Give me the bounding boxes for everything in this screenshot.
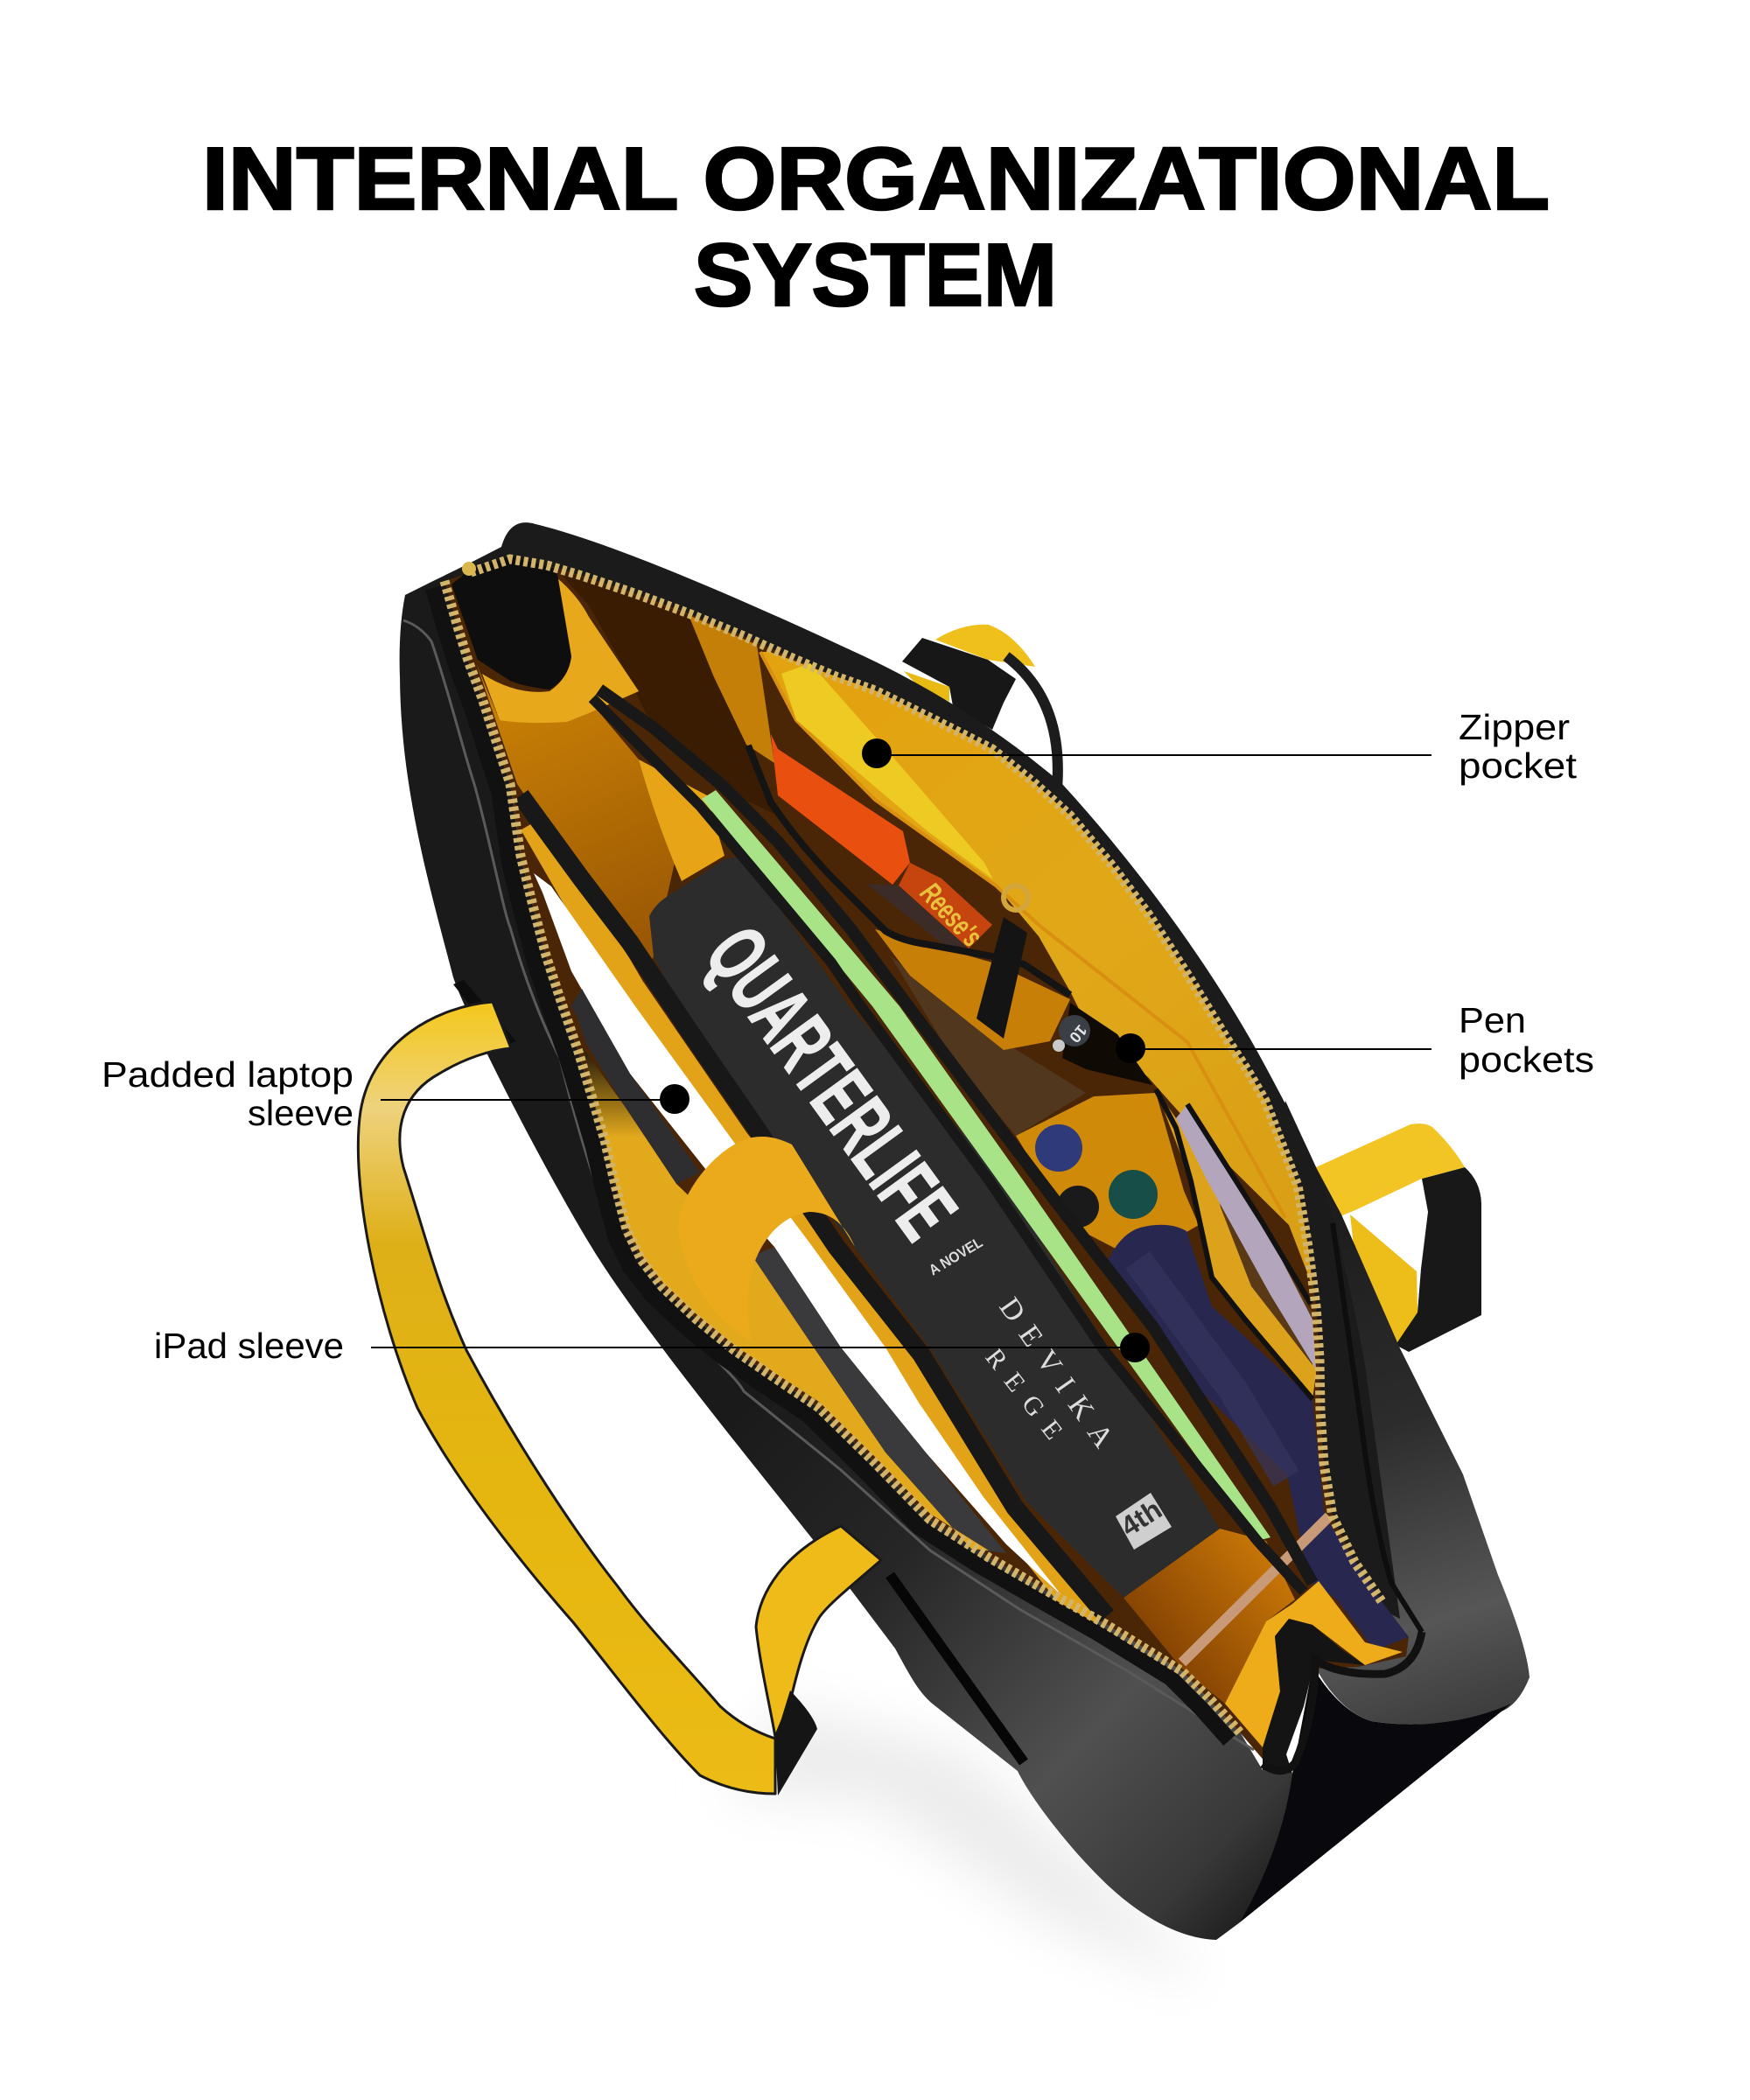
book: 4th	[1115, 1494, 1167, 1543]
callout: zipper pocket	[862, 707, 1578, 786]
callout: iPad sleeve	[154, 1326, 1150, 1366]
callout: pen pockets: Pen	[1459, 1000, 1526, 1040]
zipper tape lower	[433, 588, 1229, 1740]
pocket contents	[891, 956, 1199, 1260]
pale fold	[482, 578, 639, 723]
book	[649, 856, 1220, 1598]
pocket tab	[976, 917, 1027, 1039]
small notebook pocket	[1156, 1089, 1316, 1399]
title: INTERNAL ORGANIZATIONAL	[202, 130, 1550, 228]
zipper lower	[444, 581, 1241, 1733]
book: QUARTERLIFE	[688, 910, 975, 1256]
front strap tab	[756, 1526, 881, 1796]
pen: 10	[1066, 1021, 1090, 1046]
amber pocket face	[875, 929, 1070, 1050]
dark gusset	[1240, 1667, 1511, 1922]
title: SYSTEM	[694, 227, 1057, 325]
lining beside laptop	[534, 822, 1094, 1623]
callout: iPad sleeve: iPad sleeve	[154, 1326, 344, 1366]
skewer	[1182, 1516, 1329, 1662]
left wall	[477, 665, 675, 959]
front panel piping	[403, 620, 1254, 1750]
lower lining beside zipper	[584, 1050, 989, 1550]
callout: zipper pocket: pocket	[1459, 746, 1578, 786]
yellow notebook	[781, 663, 993, 879]
callout: padded laptop sleeve	[102, 1054, 690, 1133]
callout: zipper pocket: Zipper	[1459, 707, 1570, 747]
elastic strap	[678, 1137, 855, 1341]
inner satin back	[689, 615, 774, 763]
side piping	[1333, 1223, 1422, 1632]
zipper upper	[471, 559, 1383, 1604]
callout: padded laptop sleeve: Padded laptop	[102, 1054, 354, 1095]
zipper pull	[1004, 886, 1028, 910]
callout: pen pockets	[1116, 1000, 1594, 1080]
navy umbrella	[1107, 1225, 1409, 1650]
title	[202, 130, 1550, 325]
callout: pen pockets: pockets	[1459, 1040, 1594, 1080]
dark middle	[556, 569, 774, 814]
pen	[1053, 1003, 1152, 1085]
bottom compartment	[1124, 1529, 1295, 1704]
front panel	[400, 581, 1292, 1940]
side panel	[1260, 1101, 1530, 1725]
book: DEVIKA	[992, 1292, 1120, 1454]
far handle	[902, 625, 1058, 788]
black fold	[1263, 1619, 1422, 1774]
zipper stop	[462, 562, 476, 576]
bottom lining	[1225, 1581, 1403, 1747]
green paper strip	[702, 790, 1270, 1541]
satin pocket wall	[760, 652, 1312, 1286]
side tab	[453, 980, 516, 1047]
book: A NOVEL	[926, 1234, 985, 1278]
lower fold	[639, 760, 724, 881]
main strap	[358, 1002, 775, 1794]
leather corner pad	[452, 556, 571, 690]
interior base	[444, 559, 1409, 1763]
book: REGE	[979, 1343, 1068, 1445]
piped divider: laptop	[521, 795, 1107, 1616]
back rim	[405, 522, 1400, 1619]
pocket zipper tape	[760, 652, 1285, 1218]
front pocket slot	[890, 1575, 1024, 1762]
floor shadow	[726, 1706, 1208, 1986]
pocket edge piping	[748, 746, 1070, 995]
snacks	[771, 734, 992, 954]
laptop	[534, 873, 1061, 1595]
piped dividers: zipper pocket	[592, 690, 1312, 1592]
snacks: Reese's	[914, 877, 989, 954]
callout: padded laptop sleeve: sleeve	[248, 1093, 354, 1133]
right handle	[1316, 1124, 1481, 1352]
product photo: open tote bag	[358, 522, 1530, 1986]
